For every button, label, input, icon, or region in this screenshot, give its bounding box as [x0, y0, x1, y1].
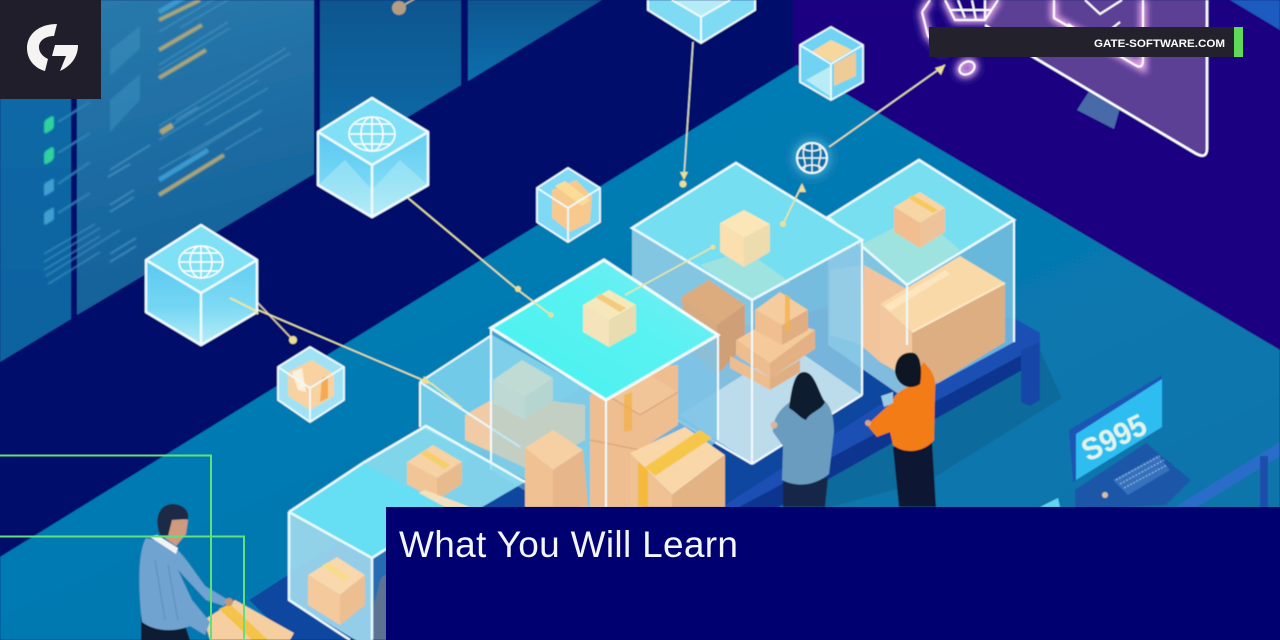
wall: status icons	[44, 102, 120, 284]
monitor	[922, 0, 1207, 156]
monitor screen	[985, 0, 1207, 156]
glass box: center cyan	[491, 260, 718, 540]
person: man with parcel	[139, 504, 294, 640]
neon icons: cart and parcel	[922, 0, 1143, 77]
cube: small parcel upper right	[800, 27, 863, 100]
table	[249, 300, 1040, 640]
register	[1069, 375, 1191, 510]
background: purple zone	[793, 0, 1280, 400]
cube: globe upper	[318, 98, 428, 217]
big parcel	[880, 256, 1005, 383]
icon: floating globe	[792, 138, 832, 178]
icon: G with bolt	[27, 24, 78, 71]
tall back parcel	[862, 265, 908, 362]
table leg	[1021, 342, 1040, 406]
face	[165, 516, 188, 546]
sweater	[139, 538, 228, 635]
floating parcel	[894, 192, 945, 248]
connector lines	[230, 42, 945, 408]
parcel	[407, 445, 462, 500]
table edge	[722, 318, 1040, 510]
hand	[225, 598, 233, 606]
parcel	[308, 557, 365, 625]
keyboard	[1113, 455, 1170, 495]
floating parcel	[583, 290, 636, 347]
hair	[157, 504, 188, 536]
parcel: front with yellow strap	[630, 427, 725, 507]
frame: green outline front	[0, 536, 244, 640]
parcel stack	[730, 292, 815, 390]
panel: wall screens	[0, 0, 602, 362]
screen frame	[1069, 375, 1162, 482]
hair	[895, 353, 921, 387]
carried parcel	[204, 600, 294, 640]
parcel: middle front	[525, 430, 588, 507]
pale parcel	[493, 360, 553, 420]
floating parcel	[720, 210, 770, 267]
top-right corner wedge	[1230, 0, 1280, 30]
trousers	[141, 614, 190, 640]
panel: title	[386, 507, 1280, 640]
site bar	[929, 27, 1243, 57]
jacket	[773, 398, 834, 485]
tan parcels row	[465, 395, 585, 470]
cube: top partial	[648, 0, 755, 43]
back parcel	[681, 280, 745, 375]
cyan lid	[491, 260, 718, 400]
frame: green outline rear	[0, 456, 211, 640]
trousers	[783, 478, 828, 507]
glass box: left middle	[420, 335, 606, 520]
hair	[789, 372, 825, 420]
logo	[0, 0, 101, 99]
trousers	[893, 442, 936, 507]
monitor stand	[1077, 90, 1120, 129]
title: What You Will Learn	[399, 524, 738, 565]
cube: small parcel lower	[278, 347, 344, 422]
person: orange jacket	[865, 353, 936, 507]
cube: small parcel center	[537, 168, 600, 242]
person: woman in denim	[770, 372, 834, 507]
register base	[1075, 443, 1191, 510]
glass box: right back	[828, 160, 1014, 400]
accent	[1234, 27, 1243, 57]
pale back box	[830, 265, 862, 345]
wall: data rows	[108, 0, 290, 262]
jacket	[867, 362, 935, 451]
counter rail	[1040, 442, 1280, 507]
wall: node dot	[392, 0, 416, 15]
phone	[881, 392, 893, 407]
glass box: center back	[632, 163, 862, 464]
table surface	[249, 300, 1040, 640]
cube: globe left	[146, 225, 258, 345]
screen	[1076, 379, 1162, 480]
screen price: S995	[1076, 407, 1152, 468]
glass box: lower front	[289, 463, 460, 640]
background person behind glass	[372, 575, 386, 640]
parcel stack	[590, 365, 678, 507]
site name: GATE-SOFTWARE.COM	[1094, 38, 1225, 50]
collar	[150, 535, 178, 554]
glass box: lower back	[363, 426, 525, 540]
icon: globe	[179, 246, 223, 278]
icon: globe	[349, 117, 395, 151]
table shadow	[800, 350, 1062, 510]
hand	[770, 422, 778, 428]
background: navy band	[0, 0, 800, 640]
